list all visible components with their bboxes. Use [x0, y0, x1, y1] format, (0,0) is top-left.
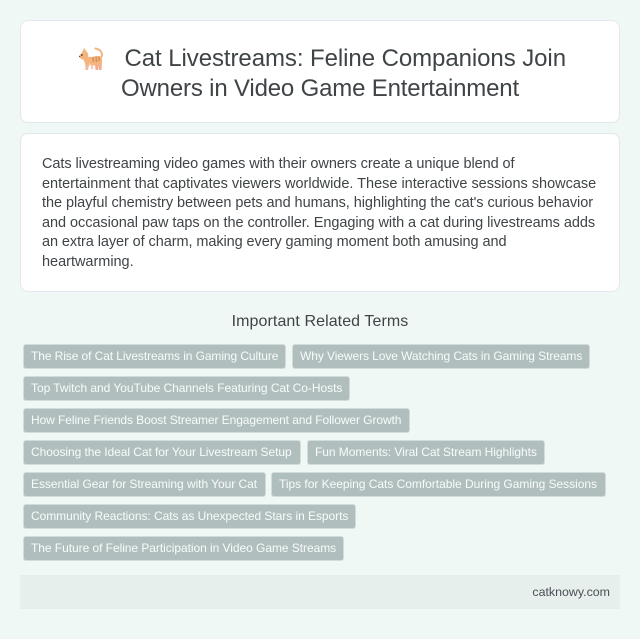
tag: Tips for Keeping Cats Comfortable During Gaming Sessions [279, 477, 597, 491]
tag [23, 536, 344, 561]
tag [292, 344, 590, 369]
panel: description [20, 133, 620, 292]
tag [23, 504, 356, 529]
heading: related terms: Important Related Terms [232, 313, 408, 330]
tag: The Future of Feline Participation in Video Game Streams [31, 541, 336, 555]
tag [307, 440, 545, 465]
text block: description: the playful chemistry between pets and humans, highlighting the cat's curious behavior [42, 195, 593, 211]
tag: Top Twitch and YouTube Channels Featuring Cat Co-Hosts [31, 381, 342, 395]
footer credit: catknowy.com [532, 585, 610, 599]
tag [23, 408, 410, 433]
panel: related terms tags [23, 344, 606, 561]
text block: description: entertainment that captivates viewers worldwide. These interactive sessions showcase [42, 176, 596, 192]
tag [23, 376, 350, 401]
footer [20, 575, 620, 609]
tag: Community Reactions: Cats as Unexpected Stars in Esports [31, 509, 348, 523]
tag: Choosing the Ideal Cat for Your Livestream Setup [31, 445, 292, 459]
title: Owners in Video Game Entertainment [121, 75, 519, 102]
title: Cat Livestreams: Feline Companions Join [124, 45, 566, 72]
tag: Essential Gear for Streaming with Your Cat [31, 477, 257, 491]
text block: description: heartwarming. [42, 254, 134, 270]
title [121, 45, 566, 102]
tag: The Rise of Cat Livestreams in Gaming Culture [31, 349, 278, 363]
tag [23, 344, 286, 369]
tag [23, 440, 301, 465]
tag: How Feline Friends Boost Streamer Engagement and Follower Growth [31, 413, 401, 427]
tag [271, 472, 606, 497]
tag: Fun Moments: Viral Cat Stream Highlights [315, 445, 537, 459]
text block: description: an extra layer of charm, making every gaming moment both amusing and [42, 234, 506, 250]
panel: header [20, 20, 620, 123]
text block: description: and occasional paw taps on the controller. Engaging with a cat during livestreams adds [42, 214, 595, 230]
tag: Why Viewers Love Watching Cats in Gaming Streams [300, 349, 582, 363]
text block: description [42, 156, 596, 270]
tag [23, 472, 266, 497]
icon: cat [79, 48, 103, 70]
text block: description: Cats livestreaming video games with their owners create a unique blend of [42, 156, 514, 172]
